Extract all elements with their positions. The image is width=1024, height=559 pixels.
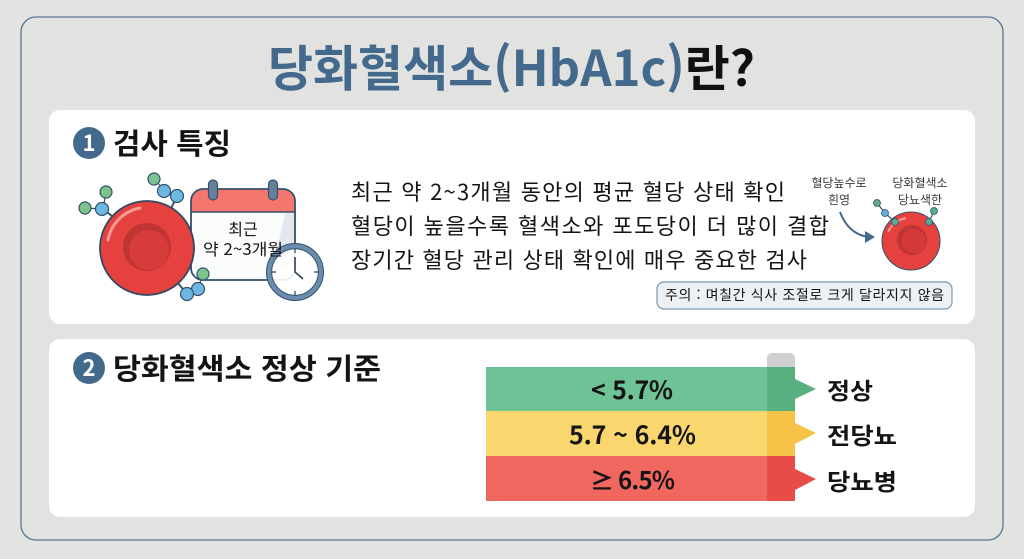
chart: HbA1c ranges — [486, 353, 897, 501]
panel: normal criteria — [49, 339, 975, 517]
heading: normal criteria: 당화혈색소 정상 기준 — [113, 346, 381, 388]
mini diagram: glycated hemoglobin: 혈당높수로 — [811, 174, 867, 191]
calendar label: 최근 — [228, 216, 258, 240]
arrow — [840, 212, 875, 243]
mini diagram: glycated hemoglobin: 당뇨색한 — [898, 191, 942, 208]
calendar label — [203, 216, 283, 260]
calendar label: 약 2~3개월 — [203, 236, 283, 260]
text block: description: 장기간 혈당 관리 상태 확인에 매우 중요한 검사 — [351, 243, 807, 275]
mini diagram: glycated hemoglobin: 흰영 — [828, 191, 850, 208]
icon: molecules on red blood cell — [79, 173, 209, 300]
band: prediabetes: 전당뇨 — [827, 417, 897, 451]
icon: clock — [266, 244, 324, 300]
number badge 2: 2 — [83, 351, 95, 383]
band: diabetes: 당뇨병 — [827, 463, 897, 497]
band: diabetes: ≥ 6.5% — [590, 461, 675, 496]
band: normal: < 5.7% — [591, 371, 673, 407]
text block: description: 혈당이 높을수록 혈색소와 포도당이 더 많이 결합 — [351, 209, 829, 241]
title: 당화혈색소(HbA1c)란? — [268, 30, 755, 101]
heading: test features: 검사 특징 — [113, 121, 231, 163]
band: normal — [486, 367, 873, 411]
band: prediabetes — [486, 411, 897, 456]
text block: description: 최근 약 2~3개월 동안의 평균 혈당 상태 확인 — [351, 175, 785, 207]
mini diagram: glycated hemoglobin: 당화혈색소 — [892, 174, 948, 191]
number badge 1: 1 — [83, 126, 95, 158]
icon: calendar — [191, 180, 295, 280]
panel: test features — [49, 110, 975, 324]
callout: caution note: 주의 : 며칠간 식사 조절로 크게 달라지지 않음 — [665, 285, 944, 305]
text block: description — [351, 175, 829, 275]
band: prediabetes: 5.7 ~ 6.4% — [569, 416, 696, 452]
number badge 2 — [73, 351, 105, 384]
mini diagram: glycated hemoglobin — [811, 174, 948, 270]
band: diabetes — [486, 456, 897, 501]
number badge 1 — [73, 126, 105, 159]
band: normal: 정상 — [827, 372, 873, 406]
